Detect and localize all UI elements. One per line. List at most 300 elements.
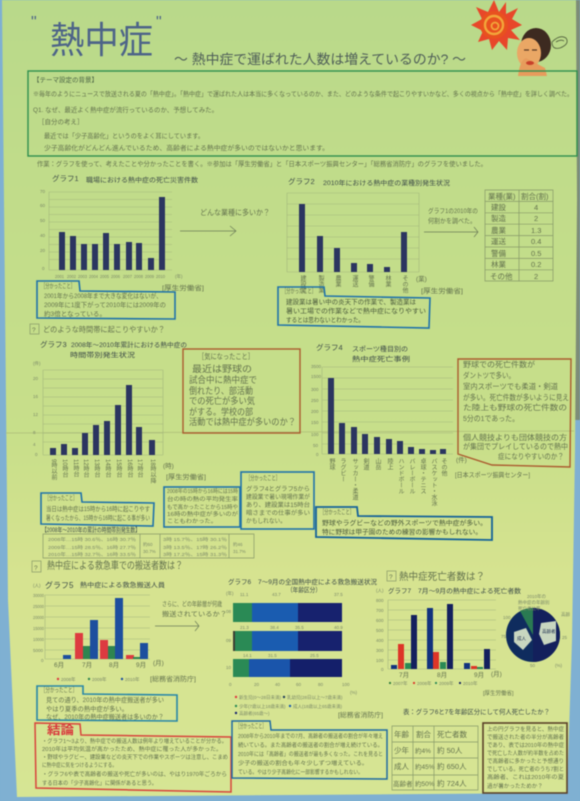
callout: industry comparison note: ［分かったこと］ [246, 473, 280, 482]
chart: graph 4: 0 [316, 452, 319, 457]
table: deaths by age: 年齢 [394, 729, 409, 739]
callout: graph 5 findings: やはり夏季の熱中症が多い。 [46, 704, 128, 713]
chart: graph 2: その他 [401, 275, 408, 294]
callout: graph 5 findings: なぜ、2010年の熱中症搬送者は多いのか？ [46, 712, 164, 721]
callout: graph 5 findings: ［分かったこと］ [41, 685, 77, 694]
panel: conclusion: ・グラフ1〜3より、熱中症での搬送人数は例年より増えていることが分かる。 [42, 737, 227, 745]
icon: tired face [517, 28, 567, 76]
chart: graph 5: 30000 [33, 593, 44, 598]
callout: industry comparison note: グラフ4とグラフ5から [246, 485, 310, 493]
chart: graph 4: ラグビー [339, 458, 346, 482]
panel: conclusion: ・野球やラグビー、建設業などの炎天下での作業やスポーツは注意し、こまめ [42, 753, 228, 761]
chart: graph 5: 25000 [33, 604, 44, 609]
callout: what caught my attention: 最近は野球の [192, 363, 252, 374]
annotation: which age group [155, 599, 227, 631]
chart: graph 2: 建設業 [299, 274, 306, 294]
chart: age pie: 2010年の [527, 593, 547, 600]
chart: graph 1: 職場における熱中症の死亡災害件数 [86, 175, 199, 184]
chart: graph 1: 50 [40, 218, 46, 223]
chart: graph 3: 2008年〜2010年累計における熱中症の [71, 340, 187, 349]
chart: graph 4: 剣道 [362, 458, 369, 471]
panel: theme background [28, 71, 577, 156]
table: industry shares: 2 [534, 214, 538, 223]
chart: graph 6 stacked bars: 40 [275, 682, 281, 687]
chart: graph 5: 2010年 [125, 676, 140, 683]
chart: graph 4: 100 [311, 432, 319, 437]
table: deaths by age: 約4% [415, 746, 431, 755]
title: " [31, 14, 37, 31]
callout: what caught my attention: 活動では熱中症が多いのか？ [189, 416, 296, 427]
chart: graph 7: 800 [376, 598, 384, 603]
chart: graph 1: 2001 [55, 274, 64, 279]
chart: graph 6 stacked bars: 31.5 [268, 653, 277, 658]
chart: graph 5: 7月 [82, 661, 92, 669]
callout: peak hours note: こともわかった。 [167, 518, 217, 525]
chart: graph 5: 20000 [33, 615, 44, 620]
chart: graph 7: 600 [376, 618, 384, 623]
chart: graph 6 stacked bars: 100 [342, 682, 350, 687]
panel: theme background: 【テーマ設定の背景】 [33, 75, 98, 84]
chart: graph 1: 2010 [156, 274, 165, 279]
chart: graph 6 stacked bars: 08 [226, 609, 232, 614]
callout: baseball deaths note: が多い。死亡件数が多いように見え [463, 392, 569, 402]
callout: what caught my attention: での死亡が多い気 [189, 395, 255, 406]
chart: graph 6 stacked bars [226, 577, 383, 719]
table: deaths by age: 約 50人 [437, 745, 463, 755]
chart: graph 3: 時間帯別発生状況 [70, 350, 136, 359]
chart: graph 6 stacked bars: 35.5 [295, 625, 304, 630]
chart: graph 1: 2004 [89, 274, 98, 279]
chart: graph 4: 熱中症死亡事例 [352, 354, 411, 363]
callout: table conclusion: であり、表では2010年の熱中症 [487, 741, 564, 749]
panel: theme background: 少子高齢化がどんどん進んでいるため、高齢者による熱中症が多いのではないかと思います。 [44, 143, 329, 152]
chart: graph 1: グラフ1 [52, 173, 79, 183]
chart: graph 4: スポーツ種目別の [352, 344, 408, 353]
chart: graph 1: 40 [40, 233, 46, 238]
callout: graph 1 findings: 2009年に1度下がって2010年には2009年の [44, 300, 166, 309]
annotation: which age group: 搬送されているか？ [162, 609, 227, 618]
table: deaths by age: 死亡者数 [437, 729, 467, 739]
heading: ambulance question: ? [34, 565, 38, 572]
callout: graph 2 findings: 暑い工場での作業などで熱中症になりやすい [286, 306, 426, 315]
chart: graph 6 stacked bars: 成人(18歳以上65歳未満) [293, 703, 343, 710]
chart: graph 2: [厚生労働省] [421, 286, 463, 295]
table: industry shares: 割合(割) [521, 191, 549, 201]
chart: graph 6 stacked bars: グラフ6 [228, 577, 252, 586]
callout: graph 6 findings: 2008年から2010年までの7月、高齢者の搬送者の割合が年々増え [238, 732, 383, 740]
chart: graph 7: 2008年 [417, 680, 432, 687]
chart: graph 3: (件) [33, 360, 41, 367]
table: industry shares: 農業 [491, 225, 506, 235]
chart: graph 1: 60 [40, 203, 46, 208]
chart: graph 5: 2009年 [92, 676, 107, 683]
chart: graph 2: 2010年における熱中症の業種別発生状況 [323, 178, 451, 187]
chart: graph 6 stacked bars: 少年(7歳以上18歳未満) [239, 703, 286, 710]
callout: graph 6 findings: 2010年には「高齢者」の搬送者が最も多くなった。これを見ると [238, 750, 383, 758]
chart: graph 1: 0 [42, 266, 45, 271]
callout: industry comparison note: 暗さまでの仕事が多い [246, 509, 310, 517]
table: industry shares: 製造 [491, 213, 506, 223]
chart: graph 5: 8月 [109, 661, 119, 669]
chart: graph 6 stacked bars: 11.1 [240, 592, 249, 597]
chart: graph 7: 2007年 [393, 680, 408, 687]
chart: graph 6 stacked bars: （年齢区分） [287, 585, 321, 594]
callout: industry comparison note: かもしれない。 [246, 518, 286, 525]
chart: graph 6 stacked bars: 10 [226, 665, 232, 670]
table: industry shares: 警備 [491, 248, 506, 258]
chart: graph 6 stacked bars: 80 [318, 682, 324, 687]
chart: graph 7: 2009年 [439, 680, 454, 687]
chart: graph 6 stacked bars: 25.5 [310, 653, 319, 658]
callout: what caught my attention: がする。学校の部 [189, 406, 253, 417]
callout: table conclusion: で死亡した人数が約半数を占めた [487, 749, 564, 757]
heading: age table: 表：グラフ6と7を年齢区分にして何人死亡したか？ [403, 707, 550, 716]
chart: age pie: 25 [562, 635, 568, 640]
panel: theme background: 最近では「少子高齢化」というのをよく耳にしています。 [44, 131, 204, 140]
chart: graph 3: 15時台 [115, 459, 122, 479]
heading: deaths question: 熱中症死亡者数は？ [399, 570, 485, 583]
table: hourly occurrence: 2008年…15時 30.6％、16時 30.7％ [48, 536, 137, 543]
table: industry shares: 2 [534, 272, 538, 281]
chart: graph 6 stacked bars: 新生児(0〜28日未満) [239, 694, 282, 701]
table: industry shares: その他 [490, 271, 513, 281]
chart: graph 4: [日本スポーツ振興センター] [455, 470, 530, 479]
chart: graph 4: 250 [311, 398, 319, 403]
callout: baseball deaths note [458, 359, 571, 467]
chart: graph 3: 14時台 [104, 459, 111, 479]
callout: graph 3 findings: 当日は熱中症は15時から16時に起こりやす [46, 504, 150, 513]
callout: graph 4 findings: 特に野球は甲子園のための練習の影響かもしれない。 [322, 527, 482, 536]
table: hourly occurrence: 3時 15.7％、15時 30.1％ [163, 537, 228, 542]
chart: graph 4 [311, 342, 530, 507]
table: industry shares: 0.2 [531, 260, 541, 269]
chart: graph 6 stacked bars: 40.9 [334, 625, 343, 630]
table: industry shares: 0.5 [531, 249, 541, 258]
table: industry shares: 建設 [491, 202, 506, 212]
callout: graph 4 findings [316, 507, 492, 540]
chart: graph 5: (月) [153, 659, 164, 667]
chart: age pie: 高齢 [561, 611, 570, 618]
title: " [156, 14, 162, 31]
callout: baseball deaths note: が集団でプレイしているので熱中 [463, 441, 568, 451]
callout: peak hours note [164, 487, 240, 527]
chart: graph 1: 20 [40, 248, 46, 253]
chart: graph 7: (人) [376, 588, 384, 593]
chart: graph 7: 7月〜9月の熱中症による死亡者数 [418, 586, 522, 595]
table: deaths by age: 高齢者 [393, 779, 413, 788]
chart: graph 1: 70 [40, 189, 46, 194]
chart: graph 3: 12時台 [82, 459, 89, 479]
annotation: which age group: さらに、どの年齢層が何歳 [162, 599, 222, 608]
chart: graph 5: (人) [33, 583, 41, 588]
annotation: graph 1 share note: グラフ1の2010年の [428, 206, 478, 215]
callout: industry comparison note: あり、建設業は15時台 [246, 501, 310, 509]
callout: baseball deaths note: 個人競技よりも団体競技の方 [463, 432, 568, 442]
chart: graph 5: [総務省消防庁] [150, 674, 196, 683]
chart: graph 1: 2003 [78, 274, 87, 279]
callout: table conclusion: で高齢者に多かったと予想通り [487, 757, 564, 765]
chart: graph 7: 500 [376, 628, 384, 633]
callout: what caught my attention: 試合中に熱中症で [189, 374, 257, 385]
chart: graph 5: 5000 [33, 648, 43, 653]
chart: graph 7: グラフ7 [388, 586, 412, 595]
chart: graph 2: 農業 [334, 274, 341, 288]
chart: graph 5: 15000 [33, 626, 44, 631]
callout: table conclusion: 高齢者、これは2010年の夏 [487, 773, 564, 781]
chart: graph 3: グラフ3 [40, 339, 67, 349]
chart: graph 6 stacked bars: 高齢者(65歳〜) [239, 710, 270, 717]
chart: graph 2 [287, 176, 463, 295]
callout: graph 2 findings: 建設業は暑い中の炎天下の作業で、製造業は [286, 297, 416, 306]
chart: graph 2: 製造業 [317, 274, 324, 294]
annotation: graph 1 share note: 何割かを調べた。 [428, 216, 476, 225]
table: industry shares: 1.3 [531, 226, 541, 235]
heading: ambulance question: 熱中症による救急車での搬送者数は？ [47, 559, 183, 572]
chart: graph 3: 11時台 [72, 459, 79, 479]
chart: graph 2: グラフ2 [288, 176, 315, 186]
panel: conclusion: する日本の「少子高齢化」に関係があると思う。 [42, 779, 157, 787]
chart: graph 7: 300 [376, 648, 384, 653]
callout: baseball deaths note: た陸上も野球の死亡件数の [463, 402, 567, 412]
chart: graph 6 stacked bars: [総務省消防庁] [338, 710, 383, 719]
chart: graph 1: 2006 [111, 274, 120, 279]
chart: graph 3: 13時台 [93, 459, 100, 479]
callout: graph 6 findings: ている。やはり少子高齢化に一部影響するかもしれない。 [238, 768, 363, 776]
chart: graph 7: 8月 [437, 671, 447, 679]
chart: graph 6 stacked bars: 7〜9月の全国熱中症による救急搬送状況 [258, 577, 377, 586]
table: hourly occurrence: 31.7% [233, 549, 246, 554]
chart: graph 5: 2008年 [61, 676, 76, 683]
chart: graph 7: 0 [381, 667, 384, 672]
table: industry shares: 4 [534, 203, 538, 212]
chart: graph 3: 18時以降 [149, 459, 156, 485]
chart: graph 1: 2007 [123, 274, 132, 279]
chart: graph 4: サッカー・柔道 [351, 458, 358, 501]
chart: graph 3: (時) [163, 462, 174, 470]
chart: graph 7: 400 [376, 638, 384, 643]
icon: sun [471, 0, 522, 50]
callout: graph 5 findings: 見ての通り、2010年の熱中症搬送者が多い [46, 695, 164, 704]
table: hourly occurrence: 2010年…15時 32.7％、16時 33.5％ [48, 551, 137, 558]
chart: graph 6 stacked bars: 37.5 [334, 592, 343, 597]
chart: graph 1: 2005 [100, 274, 109, 279]
callout: graph 2 findings: するとは思わないとわかった。 [286, 316, 364, 324]
callout: graph 1 findings: 2001年から2008年まで大きな変化はないが、 [44, 291, 162, 300]
chart: graph 7: [厚生労働省] [483, 689, 514, 697]
callout: graph 1 findings [37, 281, 175, 319]
table: hourly occurrence: 30.7% [143, 549, 156, 554]
callout: baseball deaths note: 野球での死亡件数が [463, 359, 536, 369]
chart: graph 1 [40, 173, 204, 292]
chart: age pie: 熱中症の年齢別 [518, 599, 550, 606]
callout: graph 2 findings [278, 286, 430, 328]
table: deaths by age: 少年 [394, 745, 409, 755]
chart: graph 1: [厚生労働省] [162, 283, 204, 292]
chart: age pie: 成人 [517, 635, 526, 642]
chart: graph 4: その他 [440, 458, 447, 477]
callout: graph 3 findings [41, 493, 154, 526]
callout: graph 1 findings: ［分かったこと］ [41, 281, 75, 290]
chart: age pie: 50 [530, 663, 536, 668]
callout: graph 5 findings [37, 685, 177, 721]
heading: ambulance question [32, 559, 183, 572]
callout: graph 4 findings: 野球やラグビーなどの野外スポーツで熱中症が多い。 [322, 518, 487, 527]
chart: graph 1: 2002 [67, 274, 76, 279]
callout: what caught my attention [183, 349, 300, 433]
chart: graph 6 stacked bars: 43.7 [272, 592, 281, 597]
callout: graph 6 findings: ［分かったこと］ [236, 721, 266, 730]
chart: graph 2: 林業 [384, 274, 391, 288]
table: industry shares: 林業 [491, 259, 506, 269]
chart: graph 7: 100 [376, 658, 384, 663]
chart: graph 5: 0 [41, 658, 44, 663]
table: deaths by age: 割合 [416, 729, 431, 739]
callout: table conclusion [483, 723, 567, 793]
table: hourly occurrence: 約60 [143, 541, 153, 548]
chart: graph 4: バレーボール [408, 458, 415, 494]
chart: graph 4: ハンドボール [397, 458, 404, 494]
callout: baseball deaths note: 5分の1であった。 [463, 414, 519, 423]
chart: age pie: 100 [503, 615, 511, 620]
chart: graph 1: (年) [175, 273, 183, 280]
chart: graph 3: 16 [33, 394, 39, 399]
text: work note: 作業：グラフを使って、考えたことや分かったことを書く。※参加は「厚生労働省」と「日本スポーツ振興センター」「総務省消防庁」のグラフを使いました。 [37, 159, 487, 168]
chart: graph 3: 17時台 [136, 459, 143, 479]
panel: conclusion: ・グラフ6や表で高齢者の搬送や死亡が多いのは、やはり1970年ごろから [42, 770, 227, 778]
table: hourly occurrence: 2009年…15時 28.5％、16時 27.7％ [48, 544, 137, 551]
chart: age pie [501, 593, 570, 668]
chart: graph 3: 8 [33, 430, 36, 435]
heading: time of day question: どのような時間帯に起こりやすいか？ [43, 324, 165, 334]
callout: graph 6 findings: 少子の搬送の割合も年々少しずつ増えている。 [238, 759, 368, 767]
callout: peak hours note: 2008年の15時から16時には15時 [167, 487, 238, 495]
chart: graph 7: (月) [491, 670, 502, 678]
table: industry shares: 0.4 [531, 237, 541, 246]
subtitle: 〜 熱中症で運ばれた人数は増えているのか? 〜 [174, 52, 466, 67]
chart: graph 6 stacked bars: 14.1 [243, 653, 252, 658]
chart: graph 6 stacked bars: 0 [229, 682, 232, 687]
chart: graph 3: [厚生労働省] [166, 472, 206, 481]
chart: graph 3: 0 [35, 452, 38, 457]
chart: graph 3: 9時以前 [50, 459, 57, 482]
callout: what caught my attention: 倒れたり、部活動 [189, 385, 253, 396]
chart: graph 6 stacked bars: 60 [296, 682, 302, 687]
chart: graph 4: 300 [311, 387, 319, 392]
chart: graph 3: 16時台 [126, 459, 133, 479]
table: deaths by age: 約 724人 [437, 778, 467, 788]
callout: industry comparison note [241, 472, 314, 529]
table: hourly occurrence: 約46 [233, 541, 243, 548]
chart: graph 4: 200 [311, 409, 319, 414]
chart: age pie: 高齢者 [542, 628, 556, 635]
chart: age pie: 75 [501, 634, 507, 639]
chart: graph 5: グラフ5 [45, 580, 74, 590]
table: industry shares [485, 190, 553, 281]
callout: graph 2 findings: ［分かったこと］ [282, 286, 316, 295]
callout: what caught my attention: ［気になったこと］ [198, 351, 254, 361]
callout: graph 6 findings [232, 721, 387, 779]
table: hourly occurrence: 3時 17.2％、15時 31.3％ [163, 552, 228, 557]
panel: conclusion: に熱中症に気をつけるようにする。 [42, 761, 117, 769]
chart: graph 5: 9月 [136, 661, 146, 669]
chart: graph 4: 3500 [311, 364, 322, 369]
callout: graph 1 findings: 約3倍となっている。 [44, 309, 106, 318]
chart: graph 6 stacked bars: 09 [226, 638, 232, 643]
callout: table conclusion: でしている。死亡者のうち7割と [487, 765, 564, 773]
chart: graph 7: 700 [376, 608, 384, 613]
chart: graph 4: (件) [456, 455, 467, 464]
panel: conclusion: 結論 [47, 723, 75, 737]
chart: graph 5 [33, 580, 196, 683]
chart: graph 2: 運送 [351, 274, 358, 288]
table: industry shares: 運送 [491, 236, 506, 246]
callout: industry comparison note: 建設業で暑い現場作業が [246, 493, 310, 501]
callout: graph 6 findings: 続いている。また高齢者の搬送者の割合が増え続けている。 [238, 741, 383, 749]
panel: theme background: Q1. なぜ、最近よく熱中症が流行っているのか、予想してみた。 [33, 105, 218, 114]
chart: graph 5: 10000 [33, 637, 44, 642]
table: industry shares: 業種(業) [488, 191, 516, 201]
callout: peak hours note: もで高かったことから15時や [167, 503, 238, 511]
chart: graph 5: 熱中症による救急搬送人員 [80, 580, 166, 589]
chart: graph 7: 7月 [399, 671, 409, 679]
chart: graph 3 [33, 339, 206, 485]
table: deaths by age: 約45% [415, 762, 435, 771]
callout: baseball deaths note: 症になりやすいのか？ [498, 452, 564, 461]
table: deaths by age [392, 726, 478, 790]
callout: graph 4 findings: ［分かったこと］ [320, 507, 354, 516]
chart: graph 6 stacked bars: (%) [350, 690, 357, 695]
chart: graph 2: (業) [416, 274, 427, 283]
callout: table conclusion: 上の円グラフを見ると、熱中症 [487, 725, 564, 733]
annotation: which industry: どんな業種に多いか？ [200, 207, 270, 217]
callout: baseball deaths note: 室内スポーツでも柔道・剣道 [463, 381, 558, 391]
callout: graph 3 findings: 暑くなったから、15時から16時に起こる事が多い [46, 513, 150, 522]
chart: graph 4: 野球 [328, 457, 335, 470]
panel: theme background: ［自分の考え］ [38, 117, 84, 126]
chart: graph 4: 山岳 [374, 457, 381, 471]
chart: graph 4: 1500 [311, 374, 322, 379]
chart: graph 4: 150 [311, 420, 319, 425]
annotation: graph 1 share note [424, 206, 478, 237]
table: deaths by age: 成人 [394, 761, 409, 771]
chart: graph 3: 10時台 [61, 459, 68, 479]
chart: graph 7: 2010年 [463, 680, 478, 687]
chart: graph 3: 4 [33, 442, 36, 447]
chart: graph 4: 50 [313, 443, 319, 448]
chart: age pie: 死亡者比率 [518, 605, 541, 612]
callout: graph 3 findings: ［分かったこと］ [45, 493, 77, 502]
chart: graph 1: 2009 [145, 274, 154, 279]
callout: peak hours note: 16時の熱中症が多いのが [167, 510, 238, 518]
table: deaths by age: 約50% [415, 779, 435, 788]
heading: time of day question: ? [32, 327, 36, 334]
table: hourly occurrence: 3時 13.5％、17時 26.2％ [163, 545, 228, 550]
callout: peak hours note: 台の時の熱の平均発生率 [167, 495, 238, 503]
chart: graph 3: 12 [33, 412, 39, 417]
chart: graph 6 stacked bars: 20 [254, 682, 260, 687]
chart: graph 6 stacked bars: 21.3 [240, 625, 249, 630]
chart: graph 4: グラフ4 [316, 342, 343, 352]
title: 熱中症 [50, 20, 153, 61]
chart: graph 6 stacked bars: 38.4 [270, 625, 279, 630]
chart: graph 2: 警備 [367, 274, 374, 288]
chart: graph 4: バスケット・水泳 [430, 458, 437, 507]
table: deaths by age: 約 650人 [437, 761, 467, 771]
chart: graph 7: 9月 [474, 671, 484, 679]
chart: graph 4: 卓球・テニス [419, 457, 426, 494]
callout: baseball deaths note: ダントツで多い。 [463, 370, 515, 380]
chart: graph 3: 20 [33, 376, 39, 381]
